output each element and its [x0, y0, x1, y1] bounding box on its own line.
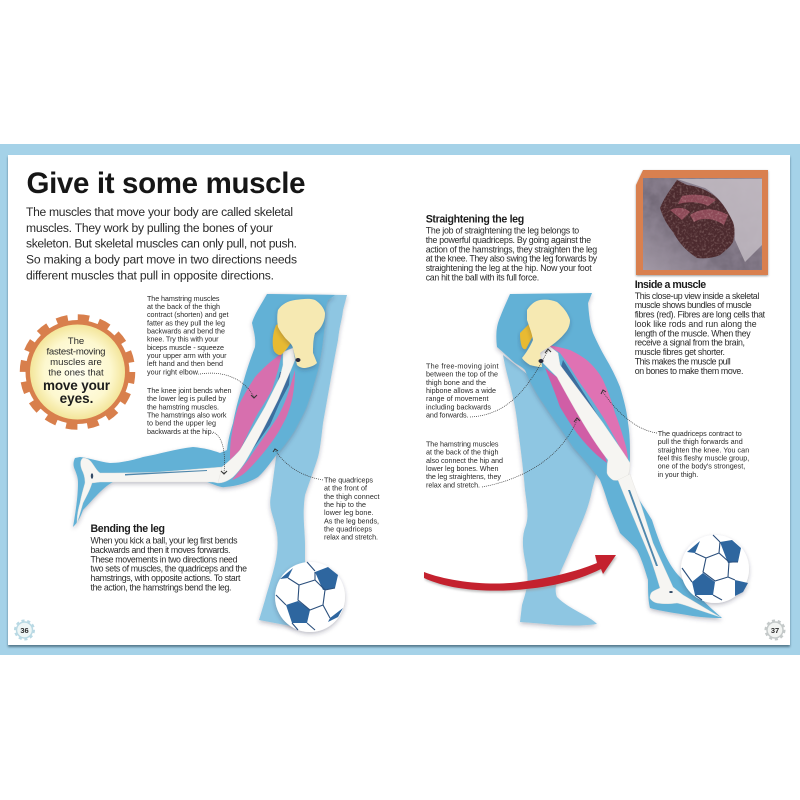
hipbone — [522, 300, 570, 367]
hipbone — [277, 299, 325, 368]
page background band — [0, 144, 800, 655]
femur — [538, 345, 630, 480]
label: free-moving joint: and forwards. — [426, 410, 468, 420]
inside a muscle text: muscle fibres get shorter. — [635, 347, 725, 357]
gear callout: muscles are — [50, 357, 102, 368]
ankle hole — [669, 591, 673, 593]
title: Give it some muscle — [26, 167, 306, 200]
label: quadriceps, straightening: straighten the knee. You can — [658, 445, 749, 454]
bending the leg text: Bending the leg — [90, 523, 165, 535]
label: knee joint: backwards at the hip. — [147, 427, 214, 436]
label: knee joint: The hamstrings also work — [147, 410, 227, 420]
page number 36: 36 — [20, 626, 29, 635]
gear callout: The — [68, 336, 84, 347]
label: free-moving joint: hipbone allows a wide — [426, 386, 496, 395]
label: quadriceps, straightening — [658, 429, 749, 479]
label: quadriceps, bending: at the front of — [324, 484, 367, 493]
label: hamstring, straightening: lower leg bones. When — [426, 464, 498, 473]
red arrow — [424, 555, 616, 591]
inside a muscle text: look like rods and run along the — [635, 319, 757, 329]
page number 36 — [16, 621, 34, 639]
ankle hole — [91, 473, 93, 479]
inside a muscle text: length of the muscle. When they — [635, 328, 751, 338]
kicking leg — [496, 293, 722, 618]
joint hole — [538, 359, 544, 363]
intro text: different muscles that pull in opposite directions. — [26, 268, 274, 282]
label: quadriceps, bending: The quadriceps — [324, 476, 373, 484]
page number 37: 37 — [771, 626, 779, 635]
straightening the leg text: straightening the leg at the hip. Now your foot — [426, 263, 592, 273]
intro text: skeleton. But skeletal muscles can only pull, not push. — [26, 237, 297, 251]
thigh shadow — [232, 372, 290, 462]
bending the leg text: backwards and then it moves forwards. — [90, 545, 230, 555]
label: quadriceps, straightening: one of the body's strongest, — [658, 462, 745, 471]
label: free-moving joint: including backwards — [426, 402, 491, 411]
page number 37 — [766, 621, 784, 639]
inside a muscle text: muscle shows bundles of muscle — [635, 300, 752, 310]
label: quadriceps, straightening: feel this fleshy muscle group, — [658, 454, 749, 462]
intro text: So making a body part move in two directions needs — [26, 252, 297, 266]
yellow pelvis — [273, 322, 292, 355]
label: hamstring, bending: knee. Try this with your — [147, 335, 219, 344]
lower leg bone — [77, 458, 222, 523]
label: quadriceps, bending: the quadriceps — [324, 524, 372, 534]
label: free-moving joint — [426, 362, 498, 420]
standing leg — [259, 294, 347, 627]
label: hamstring, bending: backwards and bend the — [147, 326, 225, 336]
gear callout: fastest-moving — [46, 346, 106, 358]
bending the leg text: two sets of muscles, the quadriceps and the — [90, 564, 247, 574]
label: knee joint: to bend the upper leg — [147, 419, 216, 428]
standing leg — [503, 355, 600, 626]
shin gap — [628, 490, 658, 566]
inside a muscle text: This makes the muscle pull — [635, 356, 731, 366]
label: quadriceps, bending: the thigh connect — [324, 492, 380, 501]
straightening the leg text: action of the hamstrings, they straighten the leg — [426, 244, 597, 254]
label: hamstring, straightening: at the back of the thigh — [426, 448, 498, 457]
straightening the leg text: at the knee. They also swing the leg forwards by — [426, 254, 598, 264]
straightening the leg text: The job of straightening the leg belongs to — [426, 226, 579, 236]
left ball — [275, 562, 345, 632]
label: hamstring, bending: at the back of the thigh — [147, 302, 220, 311]
dotted leader lines, left leg — [200, 373, 323, 480]
femur — [212, 348, 295, 483]
label: free-moving joint: The free-moving joint — [426, 362, 498, 370]
kicking ball — [681, 535, 749, 603]
gear callout: move your — [43, 378, 111, 393]
gear callout: eyes. — [60, 391, 93, 406]
label: quadriceps, straightening: pull the thigh forwards and — [658, 437, 743, 446]
shin gap — [125, 470, 207, 476]
joint hole — [296, 358, 300, 362]
intro text: The muscles that move your body are called skeletal — [26, 205, 293, 219]
label: quadriceps, bending: relax and stretch. — [324, 533, 378, 542]
inside a muscle text: Inside a muscle — [635, 279, 706, 291]
inside a muscle text — [635, 279, 766, 376]
inside a muscle text: on bones to make them move. — [635, 366, 743, 376]
straightening the leg text: can hit the ball with its full force. — [426, 272, 539, 282]
label: hamstring, bending: biceps muscle - squeeze — [147, 343, 224, 352]
straightening the leg text: the powerful quadriceps. By going against the — [426, 235, 591, 245]
label: quadriceps, bending: As the leg bends, — [324, 516, 379, 525]
bending the leg text: the action, the hamstrings bend the leg. — [90, 582, 232, 592]
white book spread — [8, 155, 790, 645]
label: hamstring, bending: fatter as they pull the leg — [147, 318, 225, 327]
muscle shadows — [558, 360, 612, 455]
bending the leg text: These movements in two directions need — [90, 554, 238, 564]
label: hamstring, bending — [147, 294, 228, 376]
inside a muscle text: receive a signal from the brain, — [635, 338, 745, 348]
label: hamstring, bending: contract (shorten) and get — [147, 310, 228, 319]
straightening the leg text — [426, 214, 598, 282]
label: quadriceps, bending: the hip to the — [324, 500, 366, 509]
hamstring muscle — [545, 368, 607, 463]
label: quadriceps, bending — [324, 476, 380, 542]
label: quadriceps, bending: lower leg bone. — [324, 508, 374, 517]
hamstring muscle — [230, 353, 282, 460]
label: quadriceps, straightening: The quadriceps contract to — [658, 429, 742, 438]
label: hamstring, straightening: also connect the hip and — [426, 456, 503, 465]
label: knee joint: The knee joint bends when — [147, 386, 232, 395]
gear callout — [24, 318, 131, 426]
left leg illustration: bending — [73, 294, 347, 632]
label: free-moving joint: between the top of the — [426, 370, 498, 379]
quadriceps muscle — [232, 370, 295, 480]
intro text — [26, 205, 297, 282]
inside a muscle text: fibres (red). Fibres are long cells that — [635, 310, 766, 320]
lower leg bones — [618, 474, 720, 617]
kicking leg — [73, 294, 335, 527]
label: free-moving joint: range of movement — [426, 394, 488, 403]
label: hamstring, bending: The hamstring muscles — [147, 294, 220, 303]
yellow pelvis — [520, 323, 535, 349]
label: knee joint — [147, 386, 232, 436]
bending the leg text: hamstrings, with opposite actions. To start — [90, 573, 241, 583]
label: knee joint: the hamstring muscles. — [147, 402, 219, 411]
label: hamstring, straightening: the leg straightens, they — [426, 472, 501, 481]
label: hamstring, bending: your right elbow. — [147, 367, 200, 376]
bending the leg text — [90, 523, 247, 592]
label: free-moving joint: thigh bone and the — [426, 378, 486, 387]
straightening the leg text: Straightening the leg — [426, 214, 524, 226]
dotted leader lines, right leg — [470, 349, 657, 487]
right leg illustration: straightening — [424, 293, 749, 626]
gear callout: the ones that — [48, 368, 104, 378]
inside a muscle text: This close-up view inside a skeletal — [635, 291, 759, 301]
quadriceps muscle — [547, 345, 628, 462]
label: hamstring, bending: your upper arm with your — [147, 351, 227, 360]
label: quadriceps, straightening: in your thigh. — [658, 470, 698, 479]
label: hamstring, straightening — [426, 440, 503, 489]
muscle photo — [636, 170, 768, 275]
label: hamstring, straightening: relax and stretch. — [426, 480, 480, 489]
bending the leg text: When you kick a ball, your leg first bends — [90, 536, 238, 546]
intro text: muscles. They work by pulling the bones of your — [26, 221, 273, 235]
label: knee joint: the lower leg is pulled by — [147, 394, 226, 403]
label: hamstring, straightening: The hamstring muscles — [426, 440, 499, 448]
label: hamstring, bending: left hand and then bend — [147, 359, 223, 368]
